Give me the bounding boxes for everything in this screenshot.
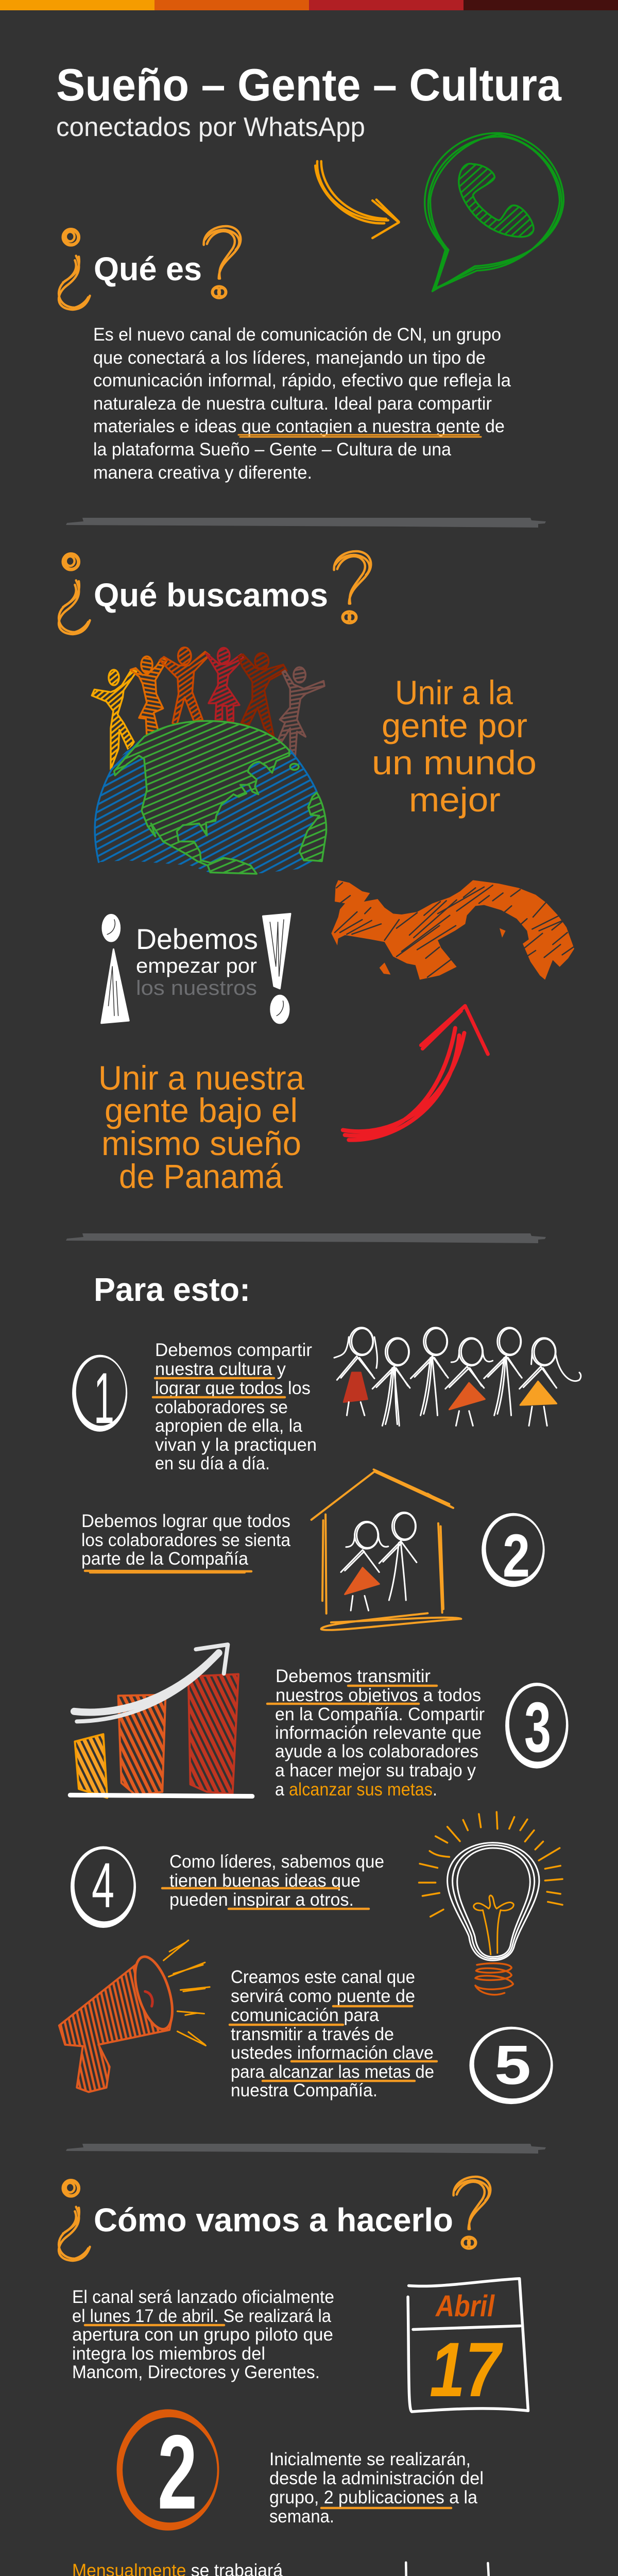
- text block: naturaleza de nuestra cultura. Ideal para compartir: [93, 394, 492, 414]
- icon: light bulb: [419, 1812, 562, 1995]
- number badge 5: 5: [494, 2033, 531, 2096]
- heading: Para esto:: [94, 1271, 250, 1308]
- icon: group of people: [334, 1328, 581, 1426]
- text block: lanzamiento: apertura con un grupo piloto que: [72, 2325, 333, 2345]
- number badge 4: 4: [92, 1851, 114, 1921]
- panel: qué es: [59, 226, 511, 483]
- text block: transmitir a través de: [231, 2024, 394, 2044]
- text block: Creamos este canal que: [231, 1967, 415, 1987]
- text block: comunicación para: [231, 2005, 380, 2025]
- icon: closing question mark: [454, 2177, 490, 2249]
- text block: en la Compañía. Compartir: [275, 1704, 485, 1724]
- text block: publicaciones: semana.: [269, 2506, 334, 2527]
- icon: closing exclamation: [263, 913, 290, 1023]
- text block: lanzamiento: integra los miembros del: [72, 2344, 265, 2364]
- callout: debemos empezar por los nuestros: Debemos: [136, 923, 258, 955]
- callout: unir a la gente: mejor: [409, 781, 501, 819]
- text block: pueden inspirar a otros.: [169, 1890, 354, 1910]
- callout: unir a la gente: gente por: [382, 706, 527, 744]
- number badge 5: [469, 2027, 553, 2104]
- heading: Qué buscamos: [94, 577, 328, 614]
- text block: nuestra Compañía.: [231, 2080, 377, 2100]
- icon: calendar: [408, 2279, 528, 2413]
- icon: opening question mark: [59, 553, 90, 634]
- text block: Debemos transmitir: [276, 1666, 431, 1686]
- text block: Es el nuevo canal de comunicación de CN, un grupo: [93, 325, 501, 345]
- text block: materiales e ideas que contagien a nuestra gente de: [93, 416, 505, 436]
- text block: para alcanzar las metas de: [231, 2062, 434, 2082]
- heading: Cómo vamos a hacerlo: [94, 2201, 453, 2239]
- text block: [230, 1967, 437, 2100]
- callout: unir a la gente: un mundo: [372, 743, 537, 782]
- callout: debemos empezar por los nuestros: [101, 913, 290, 1023]
- panel: para esto: [59, 1271, 581, 2104]
- text block: publicaciones: desde la administración del: [269, 2468, 484, 2488]
- icon: calendar: Abril: [435, 2290, 495, 2323]
- text block: nuestra cultura y: [155, 1359, 286, 1379]
- text block: lanzamiento: el lunes 17 de abril. Se realizará la: [72, 2306, 331, 2326]
- text block: comunicación informal, rápido, efectivo que refleja la: [93, 370, 511, 391]
- icon: megaphone: [59, 1940, 210, 2092]
- text block: tienen buenas ideas que: [169, 1871, 360, 1891]
- arrow: red to Panamá: [343, 1006, 488, 1140]
- text block: Debemos lograr que todos: [81, 1511, 290, 1531]
- number badge 1: [72, 1355, 127, 1438]
- text block: lanzamiento: El canal será lanzado oficialmente: [72, 2287, 334, 2307]
- text block: manera creativa y diferente.: [93, 463, 312, 483]
- title: Sueño – Gente – Cultura: [56, 59, 562, 110]
- text block: [153, 1340, 317, 1473]
- text block: colaboradores se: [155, 1397, 288, 1417]
- icon: calendar: 17: [430, 2326, 503, 2413]
- text block: [162, 1852, 384, 1910]
- arrow: orange to WhatsApp icon: [315, 161, 399, 238]
- text block: nuestros objetivos a todos: [276, 1685, 481, 1705]
- subtitle: conectados por WhatsApp: [56, 112, 365, 142]
- illustration: people holding hands on the globe: [92, 648, 327, 874]
- text block: ustedes información clave: [231, 2043, 434, 2063]
- text block: a alcanzar sus metas.: [275, 1780, 437, 1800]
- icon: opening exclamation: [101, 914, 129, 1023]
- text block: servirá como puente de: [231, 1986, 415, 2006]
- text block: publicaciones: grupo, 2 publicaciones a la: [269, 2487, 478, 2507]
- text block: apropien de ella, la: [155, 1416, 303, 1436]
- text block: parte de la Compañía: [81, 1549, 249, 1569]
- map: Panamá: [331, 880, 574, 980]
- top colour band: [0, 0, 618, 10]
- callout: debemos empezar por los nuestros: los nuestros: [136, 977, 257, 999]
- icon: WhatsApp bubble: [425, 133, 563, 291]
- number badge 4: [71, 1846, 136, 1928]
- callout: unir a la gente: Unir a la: [395, 673, 513, 711]
- text block: lanzamiento: Mancom, Directores y Gerentes.: [72, 2362, 320, 2382]
- icon: sequence of arrows: [330, 2563, 563, 2576]
- callout: unir a nuestra gente: [98, 1059, 304, 1195]
- text block: [81, 1511, 291, 1572]
- icon: orange number two: 2: [158, 2413, 197, 2531]
- text block: vivan y la practiquen: [155, 1435, 317, 1455]
- text block: información relevante que: [275, 1723, 482, 1743]
- number badge 1: 1: [94, 1358, 114, 1438]
- icon: closing question mark: [204, 226, 241, 298]
- number badge 2: [482, 1513, 545, 1590]
- item 3: [70, 1645, 569, 1800]
- panel: qué buscamos: [59, 551, 574, 1195]
- item 2: [81, 1469, 545, 1630]
- text block: ayude a los colaboradores: [275, 1741, 478, 1761]
- text block: los colaboradores se sienta: [81, 1530, 291, 1550]
- text block: la plataforma Sueño – Gente – Cultura de una: [93, 439, 452, 460]
- icon: closing question mark: [334, 551, 371, 623]
- text block: publicaciones: [269, 2449, 484, 2527]
- text block: lanzamiento: [72, 2287, 334, 2382]
- number badge 3: [505, 1683, 569, 1769]
- text block: Debemos compartir: [155, 1340, 312, 1360]
- heading: Qué es: [94, 250, 202, 287]
- item 1: [72, 1328, 581, 1473]
- item 4: [71, 1812, 562, 1995]
- panel: cómo vamos a hacerlo: [59, 2177, 563, 2576]
- icon: opening question mark: [59, 229, 90, 310]
- text block: en su día a día.: [155, 1453, 270, 1473]
- text block: [267, 1666, 485, 1800]
- icon: orange number two: [117, 2409, 219, 2531]
- callout: unir a nuestra gente: Unir a nuestra: [98, 1059, 304, 1097]
- callout: unir a nuestra gente: de Panamá: [119, 1157, 283, 1195]
- callout: unir a nuestra gente: mismo sueño: [101, 1124, 301, 1162]
- callout: debemos empezar por los nuestros: empezar por: [136, 955, 257, 977]
- text block: [93, 325, 511, 483]
- icon: house with family: [312, 1469, 461, 1630]
- text block: publicaciones: Inicialmente se realizarán,: [269, 2449, 471, 2469]
- callout: unir a la gente: [372, 673, 537, 819]
- text block: que conectará a los líderes, manejando un tipo de: [93, 348, 486, 368]
- callout: unir a nuestra gente: gente bajo el: [105, 1091, 298, 1129]
- icon: rising bar chart: [70, 1645, 252, 1798]
- icon: opening question mark: [59, 2180, 90, 2261]
- text block: a hacer mejor su trabajo y: [275, 1760, 476, 1781]
- number badge 2: 2: [503, 1522, 530, 1590]
- text block: Como líderes, sabemos que: [169, 1852, 384, 1872]
- item 5: [59, 1940, 553, 2104]
- text block: lograr que todos los: [155, 1378, 311, 1398]
- number badge 3: 3: [524, 1688, 551, 1767]
